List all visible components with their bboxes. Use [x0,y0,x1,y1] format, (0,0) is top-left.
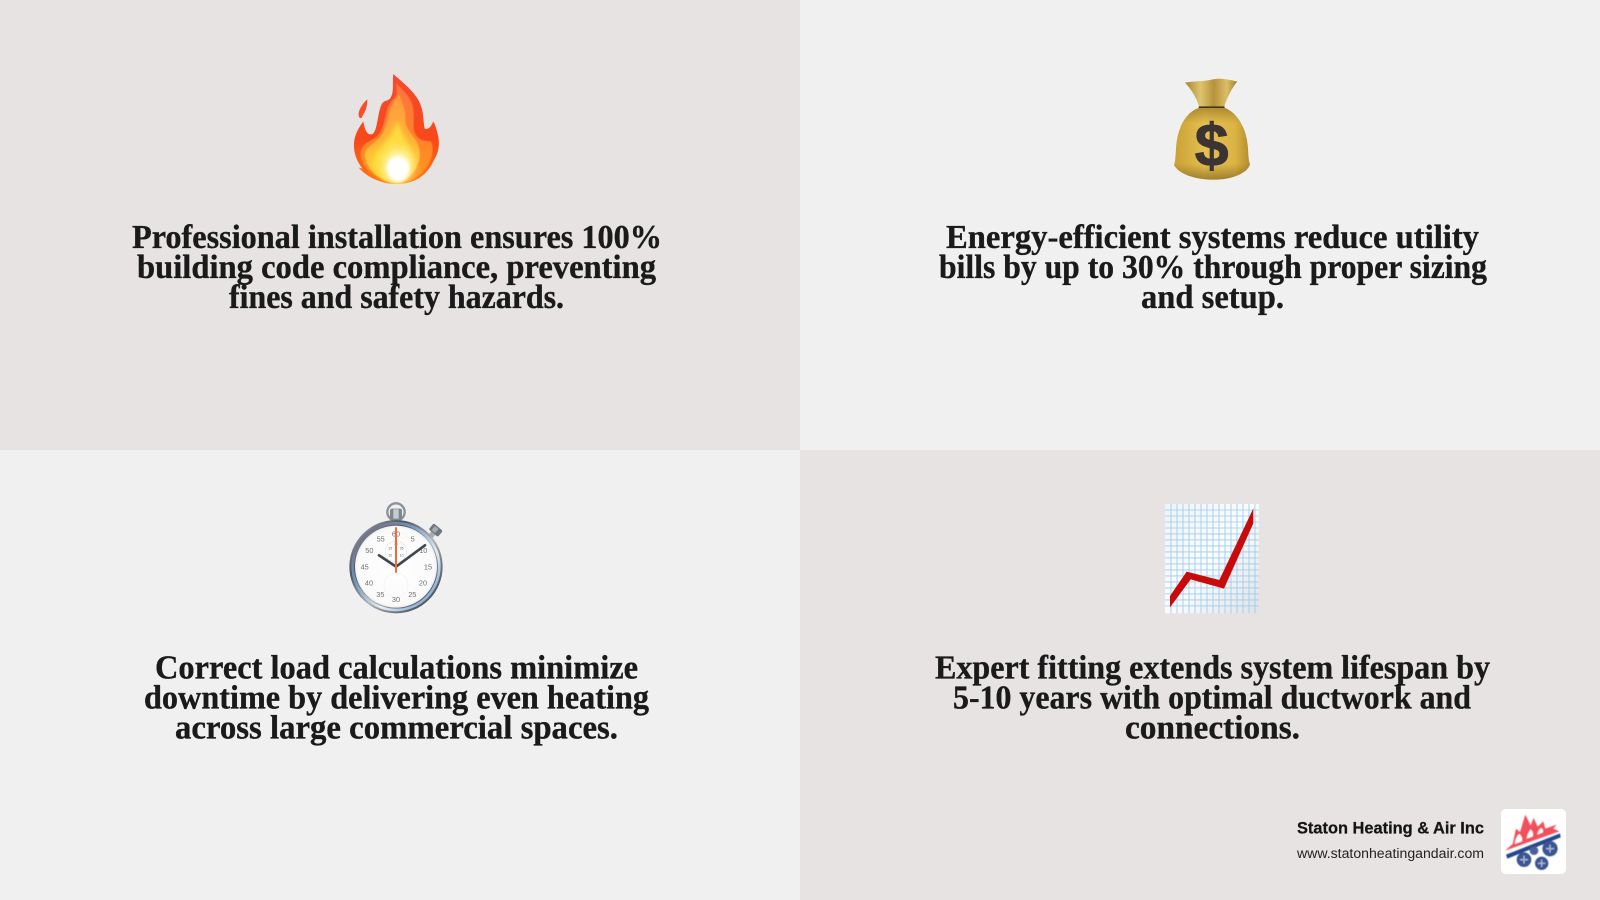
icon: stopwatch: 20 [388,554,392,558]
stopwatch dial numbers: 35 [376,590,384,599]
text: energy statement: Energy-efficient systems reduce utility [946,219,1479,256]
text: lifespan statement: Expert fitting extends system lifespan by [935,650,1490,686]
stopwatch dial numbers: 5 [411,534,415,543]
icon: stopwatch [349,503,443,613]
stopwatch dial numbers: 50 [365,546,373,555]
stopwatch dial numbers: 60 [392,529,400,538]
text: load calculation statement [144,650,649,746]
panel: energy savings [800,0,1600,450]
text: energy statement [939,219,1487,316]
stopwatch dial numbers: 15 [424,563,432,572]
logo [1501,809,1566,874]
panel: system lifespan [800,450,1600,900]
icon: stopwatch: 10 [400,554,404,558]
icon: rising chart [1165,504,1259,613]
stopwatch dial numbers: 20 [419,578,427,587]
text: energy statement: and setup. [1141,279,1284,316]
brand name: Staton Heating & Air Inc [1297,820,1484,838]
icon: stopwatch: 25 [388,546,392,550]
panel: building code compliance [0,0,800,450]
text: lifespan statement [935,650,1490,746]
text: load calculation statement: across large commercial spaces. [175,710,618,746]
stopwatch dial numbers: 55 [377,534,385,543]
text: load calculation statement: Correct load calculations minimize [155,650,638,686]
icon: dollar sign: $ [1195,111,1229,179]
stopwatch dial numbers [361,529,432,604]
stopwatch dial numbers: 40 [365,578,373,587]
text: compliance statement: fines and safety hazards. [229,279,564,316]
stopwatch dial numbers: 10 [419,546,427,555]
text: lifespan statement: 5-10 years with optimal ductwork and [953,680,1471,716]
text: lifespan statement: connections. [1125,710,1300,746]
text: compliance statement [132,219,662,316]
icon: fire [354,74,439,184]
stopwatch dial numbers: 45 [361,563,369,572]
brand website: www.statonheatingandair.com [1296,846,1484,861]
stopwatch dial numbers: 30 [392,595,400,604]
text: energy statement: bills by up to 30% through proper sizing [939,249,1487,286]
panel: load calculations [0,450,800,900]
icon: stopwatch: 30 [394,542,398,546]
text: compliance statement: Professional installation ensures 100% [132,219,662,256]
text: compliance statement: building code compliance, preventing [137,249,656,286]
icon: stopwatch: 05 [400,546,404,550]
icon: money bag [1174,79,1250,180]
text: load calculation statement: downtime by delivering even heating [144,680,649,716]
stopwatch dial numbers: 25 [408,590,416,599]
